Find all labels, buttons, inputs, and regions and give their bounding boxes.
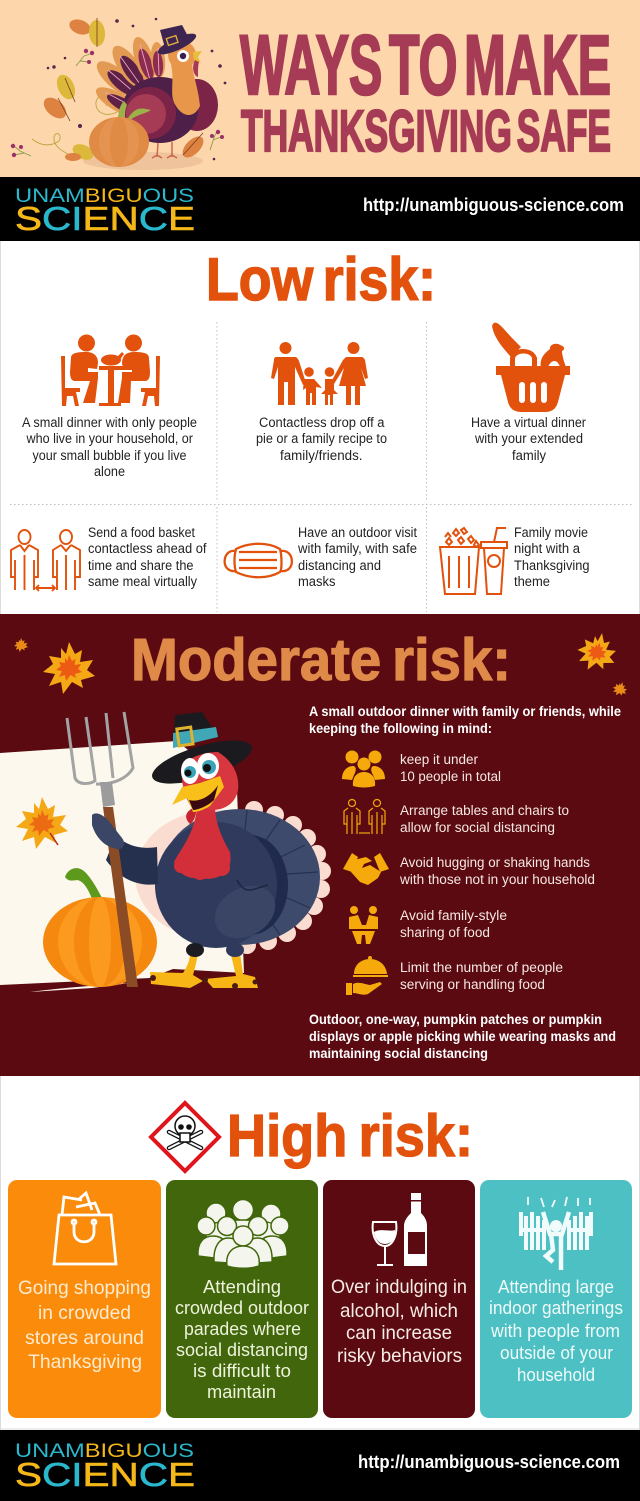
icon: two people distanced bbox=[11, 530, 80, 591]
text: attending parades: crowded outdoor bbox=[175, 1298, 309, 1318]
text: tables and chairs: Arrange tables and chairs to bbox=[400, 803, 569, 818]
icon: crowd bbox=[197, 1200, 289, 1268]
text: large gatherings bbox=[489, 1277, 623, 1385]
illustration: turkey with pitchfork and pumpkin bbox=[16, 712, 331, 992]
text: attending parades: social distancing bbox=[176, 1340, 308, 1360]
text: outdoor visit: distancing and bbox=[298, 558, 381, 573]
logo: unambiguous science footer: SCIENCE bbox=[15, 1456, 195, 1493]
text: attending parades: Attending bbox=[203, 1277, 281, 1297]
text: under 10 people: 10 people in total bbox=[400, 769, 501, 784]
logo: unambiguous science footer: UNAM BIGU OUS bbox=[15, 1441, 194, 1462]
text: outdoor visit: masks bbox=[298, 574, 336, 589]
text: virtual dinner: with your extended bbox=[474, 431, 583, 446]
illustration: cream backdrop bbox=[0, 741, 244, 985]
text: large gatherings: indoor gatherings bbox=[489, 1298, 623, 1318]
hat brim behind head bbox=[148, 731, 256, 793]
text: going shopping: Thanksgiving bbox=[28, 1351, 142, 1373]
text: tables and chairs bbox=[400, 803, 569, 835]
text: large gatherings: with people from bbox=[490, 1321, 620, 1341]
text: over indulging: alcohol, which bbox=[340, 1300, 458, 1322]
text: attending parades bbox=[175, 1277, 309, 1402]
text: over indulging: Over indulging in bbox=[331, 1276, 467, 1298]
text: small outdoor dinner: keeping the following in mind: bbox=[309, 721, 492, 736]
text: movie night: night with a bbox=[514, 541, 580, 556]
text: limit servers bbox=[400, 960, 563, 992]
text: large gatherings: outside of your bbox=[500, 1343, 613, 1363]
text: virtual dinner: family bbox=[512, 448, 546, 463]
text: attending parades: parades where bbox=[184, 1319, 301, 1339]
text: pumpkin patches: Outdoor, one-way, pumpkin patches or pumpkin bbox=[309, 1012, 602, 1027]
illustration: turkey with pumpkin and leaves bbox=[11, 17, 226, 170]
website url footer: http://unambiguous-science.com bbox=[358, 1452, 620, 1472]
icon: family holding hands bbox=[271, 342, 368, 405]
icon: face mask bbox=[225, 544, 292, 577]
card: parades bbox=[166, 1180, 318, 1418]
text: small dinner: alone bbox=[94, 464, 125, 479]
text: outdoor visit: with family, with safe bbox=[297, 541, 417, 556]
icon: distanced people bbox=[344, 800, 385, 834]
panel: header banner bbox=[0, 0, 640, 177]
icon: grocery basket bbox=[492, 323, 570, 412]
text: limit servers: Limit the number of people bbox=[400, 960, 563, 975]
website url: http://unambiguous-science.com bbox=[363, 195, 624, 215]
text: small dinner: who live in your household, or bbox=[26, 431, 193, 446]
text: food basket: same meal virtually bbox=[88, 574, 197, 589]
text: going shopping: in crowded bbox=[38, 1302, 131, 1324]
text: avoid hugging: with those not in your household bbox=[399, 872, 595, 887]
text: under 10 people: keep it under bbox=[400, 752, 478, 767]
icon: dancing party crowd bbox=[521, 1197, 592, 1270]
text: large gatherings: Attending large bbox=[498, 1277, 614, 1297]
icon: two people at dinner table bbox=[61, 334, 160, 406]
card: indoor gatherings bbox=[480, 1180, 632, 1418]
text: tables and chairs: allow for social distancing bbox=[400, 820, 555, 835]
text: contactless drop off bbox=[256, 415, 387, 463]
text: food basket: contactless ahead of bbox=[88, 541, 207, 556]
text: outdoor visit bbox=[297, 525, 417, 589]
text: small dinner bbox=[22, 415, 197, 479]
text: food basket: time and share the bbox=[88, 558, 194, 573]
text: attending parades: is difficult to bbox=[193, 1361, 291, 1381]
text: outdoor visit: Have an outdoor visit bbox=[298, 525, 417, 540]
text: attending parades: maintain bbox=[207, 1382, 276, 1402]
icon: group of people bbox=[342, 750, 385, 788]
heading: high risk: High risk: bbox=[227, 1103, 473, 1169]
heading: low risk: Low risk: bbox=[206, 246, 436, 313]
text: small dinner: your small bubble if you live bbox=[32, 448, 186, 463]
text: virtual dinner bbox=[471, 415, 586, 463]
logo: unambiguous science: UNAM BIGU OUS bbox=[15, 186, 194, 207]
icon: wine glass and bottle bbox=[373, 1193, 427, 1266]
decoration: maple leaves bbox=[14, 628, 629, 698]
text: over indulging: risky behaviors bbox=[337, 1345, 462, 1367]
text: virtual dinner: Have a virtual dinner bbox=[471, 415, 586, 430]
text: over indulging: can increase bbox=[346, 1322, 452, 1344]
icon: skull hazard diamond bbox=[151, 1103, 219, 1171]
text: contactless drop off: pie or a family recipe to bbox=[256, 431, 387, 446]
text: contactless drop off: Contactless drop off a bbox=[259, 415, 385, 430]
panel: top brand bar bbox=[0, 177, 640, 241]
text: going shopping: Going shopping bbox=[18, 1277, 151, 1299]
text: movie night bbox=[514, 525, 590, 589]
title: ways to make thanksgiving safe bbox=[240, 18, 611, 164]
text: family style: sharing of food bbox=[400, 925, 490, 940]
text: small outdoor dinner bbox=[309, 704, 621, 736]
icon: popcorn and drink bbox=[440, 528, 507, 594]
text: family style: Avoid family-style bbox=[400, 908, 507, 923]
text: small dinner: A small dinner with only people bbox=[22, 415, 197, 430]
text: pumpkin patches bbox=[309, 1012, 616, 1061]
text: pumpkin patches: maintaining social distancing bbox=[309, 1046, 488, 1061]
panel: low risk bbox=[10, 246, 632, 612]
text: movie night: theme bbox=[514, 574, 550, 589]
panel: bottom brand bar bbox=[0, 1430, 640, 1501]
icon: cloche on hand bbox=[346, 956, 388, 995]
text: large gatherings: household bbox=[517, 1365, 595, 1385]
text: avoid hugging bbox=[399, 855, 595, 887]
heading: moderate risk: Moderate risk: bbox=[131, 627, 511, 693]
logo: unambiguous science: SCIENCE bbox=[15, 200, 195, 237]
logo: unambiguous science footer bbox=[15, 1441, 195, 1493]
card: shopping bbox=[8, 1180, 161, 1418]
text: small outdoor dinner: A small outdoor dinner with family or friends, while bbox=[309, 704, 621, 719]
text: avoid hugging: Avoid hugging or shaking hands bbox=[400, 855, 590, 870]
text: family style bbox=[400, 908, 507, 940]
text: under 10 people bbox=[400, 752, 501, 784]
icon: handshake bbox=[343, 853, 389, 885]
text: pumpkin patches: displays or apple picking while wearing masks and bbox=[309, 1029, 616, 1044]
panel: high risk bbox=[8, 1103, 632, 1418]
text: food basket bbox=[88, 525, 207, 589]
text: over indulging bbox=[331, 1276, 467, 1367]
panel: moderate risk bbox=[0, 614, 640, 1076]
icon: shopping bag bbox=[54, 1193, 116, 1264]
text: going shopping bbox=[18, 1277, 151, 1373]
text: contactless drop off: family/friends. bbox=[280, 448, 362, 463]
text: food basket: Send a food basket bbox=[88, 525, 195, 540]
text: limit servers: serving or handling food bbox=[400, 977, 545, 992]
icon: people sharing food bbox=[349, 906, 378, 944]
card: alcohol bbox=[323, 1180, 475, 1418]
text: going shopping: stores around bbox=[25, 1327, 144, 1349]
text: movie night: Family movie bbox=[514, 525, 588, 540]
text: movie night: Thanksgiving bbox=[514, 558, 590, 573]
